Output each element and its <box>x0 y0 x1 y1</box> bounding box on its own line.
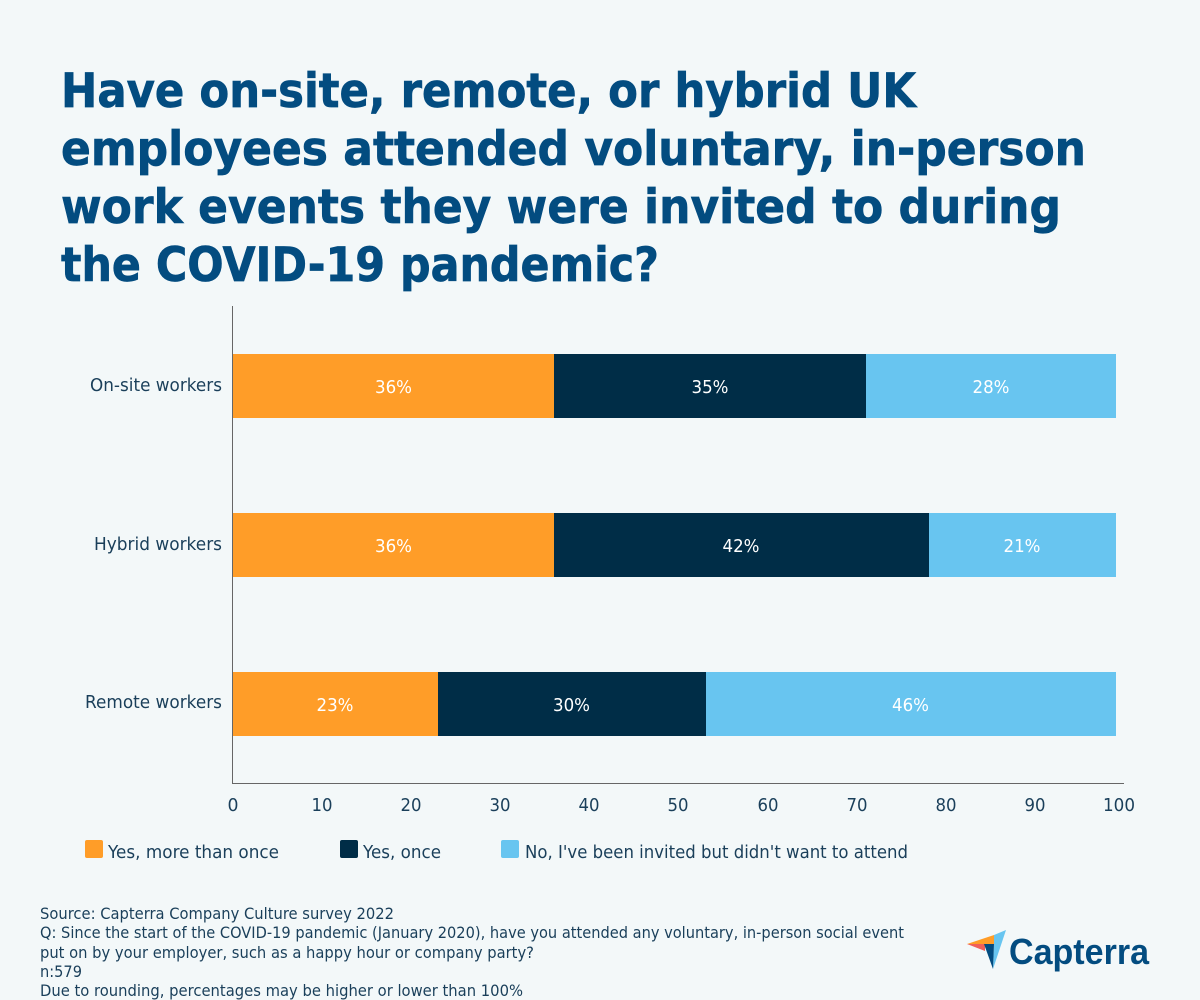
row: hybrid workers <box>94 513 1116 577</box>
x axis labels: 10 <box>312 795 332 816</box>
row: on-site workers: 35% <box>692 377 728 398</box>
x axis labels: 80 <box>936 795 956 816</box>
row: remote workers: 46% <box>892 695 929 716</box>
source notes: Q: Since the start of the COVID-19 pandemic (January 2020), have you attended any voluntary, in-person social event <box>40 923 904 942</box>
source notes: put on by your employer, such as a happy hour or company party? <box>40 943 534 962</box>
icon: capterra arrow <box>967 930 1006 969</box>
row: remote workers: 23% <box>316 695 354 716</box>
row: hybrid workers: Hybrid workers <box>94 534 222 555</box>
row: on-site workers: On-site workers <box>90 375 222 396</box>
row: remote workers: 30% <box>553 695 590 716</box>
x axis labels: 100 <box>1103 795 1135 816</box>
row: remote workers: Remote workers <box>85 692 222 713</box>
row: hybrid workers: 21% <box>1004 536 1040 557</box>
source notes: n:579 <box>40 962 82 981</box>
x axis labels: 70 <box>846 795 868 816</box>
stacked bar chart <box>85 306 1135 816</box>
row: on-site workers: 28% <box>972 377 1010 398</box>
row: hybrid workers: 36% <box>375 536 412 557</box>
capterra logo: Capterra <box>1009 931 1150 972</box>
title: employees attended voluntary, in-person <box>61 122 1086 177</box>
source notes: Due to rounding, percentages may be higher or lower than 100% <box>40 981 523 1000</box>
x axis labels: 50 <box>668 795 688 816</box>
source notes <box>40 904 904 1000</box>
legend <box>85 840 908 863</box>
title: the COVID-19 pandemic? <box>61 238 659 293</box>
x axis labels: 20 <box>400 795 422 816</box>
x axis labels: 30 <box>490 795 510 816</box>
source notes: Source: Capterra Company Culture survey 2022 <box>40 904 394 923</box>
x axis labels: 0 <box>228 795 238 816</box>
legend: no, invited but did not want to attend: No, I've been invited but didn't want to attend <box>525 842 908 863</box>
title: work events they were invited to during <box>61 180 1061 235</box>
row: on-site workers: 36% <box>375 377 412 398</box>
x axis labels <box>228 795 1135 816</box>
x axis labels: 90 <box>1024 795 1046 816</box>
axes <box>232 306 1124 784</box>
row: remote workers <box>85 672 1116 736</box>
legend: yes, once <box>340 840 441 863</box>
legend: yes, more than once: Yes, more than once <box>107 842 279 863</box>
x axis labels: 60 <box>758 795 778 816</box>
row: on-site workers <box>90 354 1116 418</box>
row: hybrid workers: 42% <box>722 536 760 557</box>
legend: yes, once: Yes, once <box>362 842 441 863</box>
title: Have on-site, remote, or hybrid UK <box>61 64 918 119</box>
x axis labels: 40 <box>578 795 600 816</box>
title <box>61 64 1086 293</box>
